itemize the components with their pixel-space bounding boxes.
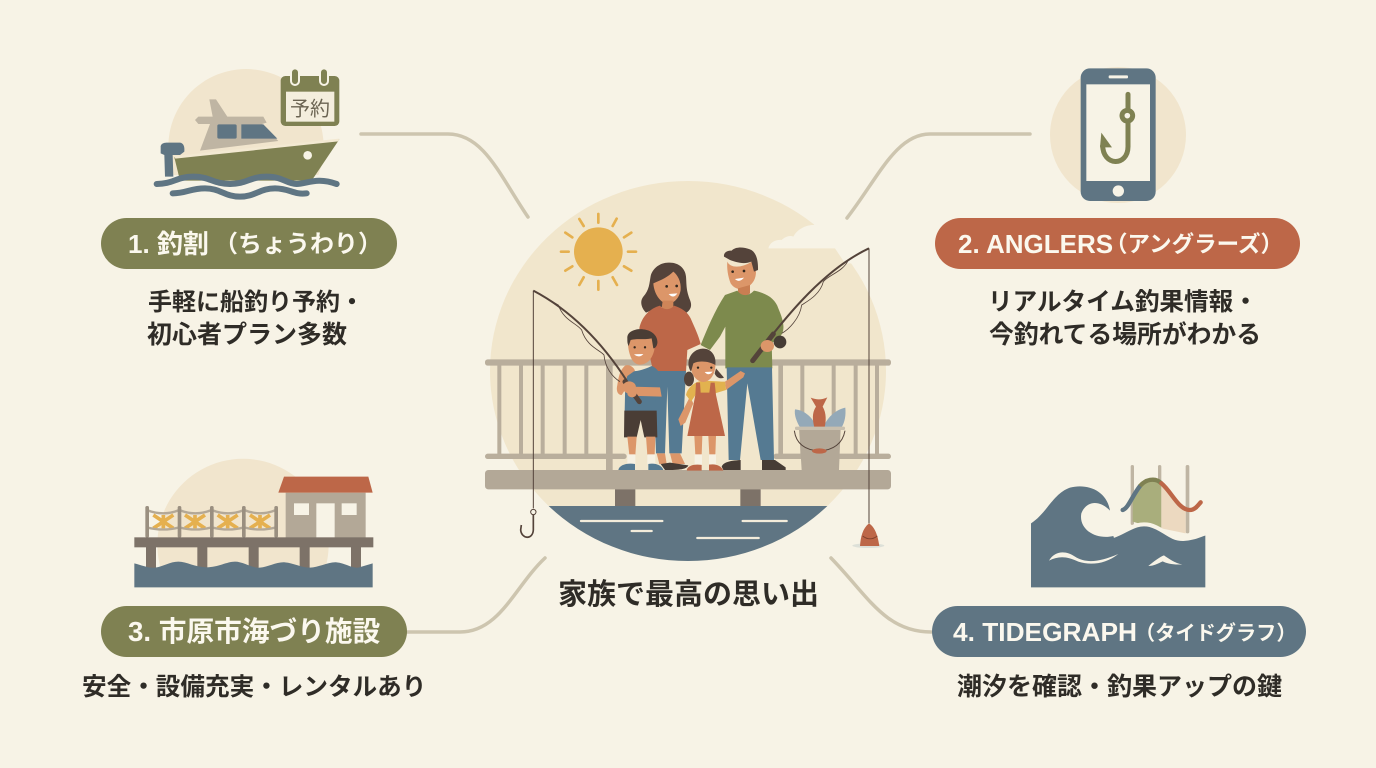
backdrop circle bbox=[490, 181, 886, 561]
cloud bbox=[768, 210, 853, 263]
heading pill 4: （タイドグラフ） bbox=[1135, 621, 1297, 645]
connector: bottom left bbox=[405, 558, 545, 632]
heading pill 2 bbox=[935, 218, 1300, 269]
icon: fishing pier with building bbox=[134, 459, 373, 587]
icon: boat with reservation calendar: 予約 bbox=[290, 97, 330, 120]
description 4: 潮汐を確認・釣果アップの鍵 bbox=[957, 673, 1282, 701]
central family fishing illustration bbox=[480, 181, 900, 566]
railing bbox=[485, 359, 891, 470]
bucket of fish bbox=[794, 397, 846, 470]
father's hand bbox=[761, 340, 774, 352]
panel 4: TIDEGRAPH bbox=[932, 465, 1306, 701]
panel 3: 市原市海づり施設 bbox=[82, 459, 426, 701]
heading pill 2: 2. ANGLERS bbox=[958, 229, 1113, 259]
connector: top left bbox=[361, 134, 528, 217]
connector: top right bbox=[847, 134, 1030, 218]
heading pill 1: 1. 釣割 bbox=[128, 229, 209, 259]
description 3: 安全・設備充実・レンタルあり bbox=[82, 673, 426, 701]
description 1 line 2: 初心者プラン多数 bbox=[147, 321, 347, 349]
water highlights bbox=[581, 521, 787, 538]
heading pill 4 bbox=[932, 606, 1306, 657]
connector: bottom right bbox=[831, 558, 931, 632]
pier deck bbox=[485, 470, 891, 506]
father bbox=[701, 247, 786, 470]
boy bbox=[617, 329, 663, 470]
heading pill 3 bbox=[101, 606, 407, 657]
icon: boat with reservation calendar bbox=[157, 68, 339, 197]
left fishing rod bbox=[521, 291, 639, 537]
right fishing rod bbox=[753, 248, 869, 523]
description 1: 手軽に船釣り予約・ bbox=[148, 289, 364, 316]
girl bbox=[678, 349, 745, 471]
panel 1: 釣割 bbox=[101, 68, 397, 349]
mother bbox=[639, 263, 701, 470]
heading pill 3: 3. 市原市海づり施設 bbox=[128, 616, 381, 647]
description 2 line 2: 今釣れてる場所がわかる bbox=[989, 320, 1261, 349]
boy's hands bbox=[623, 381, 636, 393]
description 2: リアルタイム釣果情報・ bbox=[988, 288, 1258, 316]
heading pill 4: 4. TIDEGRAPH bbox=[953, 617, 1137, 647]
central caption: 家族で最高の思い出 bbox=[558, 578, 819, 611]
heading pill 2: （アングラーズ） bbox=[1105, 231, 1283, 257]
heading pill 1 bbox=[101, 218, 397, 269]
icon: wave and tide graph bbox=[1031, 465, 1205, 587]
family bbox=[617, 247, 786, 471]
heading pill 1: （ちょうわり） bbox=[214, 231, 382, 258]
icon: phone with hook bbox=[1050, 67, 1186, 203]
bobber bbox=[852, 523, 884, 548]
panel 2: ANGLERS bbox=[935, 67, 1300, 349]
sun bbox=[561, 214, 636, 290]
water bbox=[548, 506, 828, 561]
